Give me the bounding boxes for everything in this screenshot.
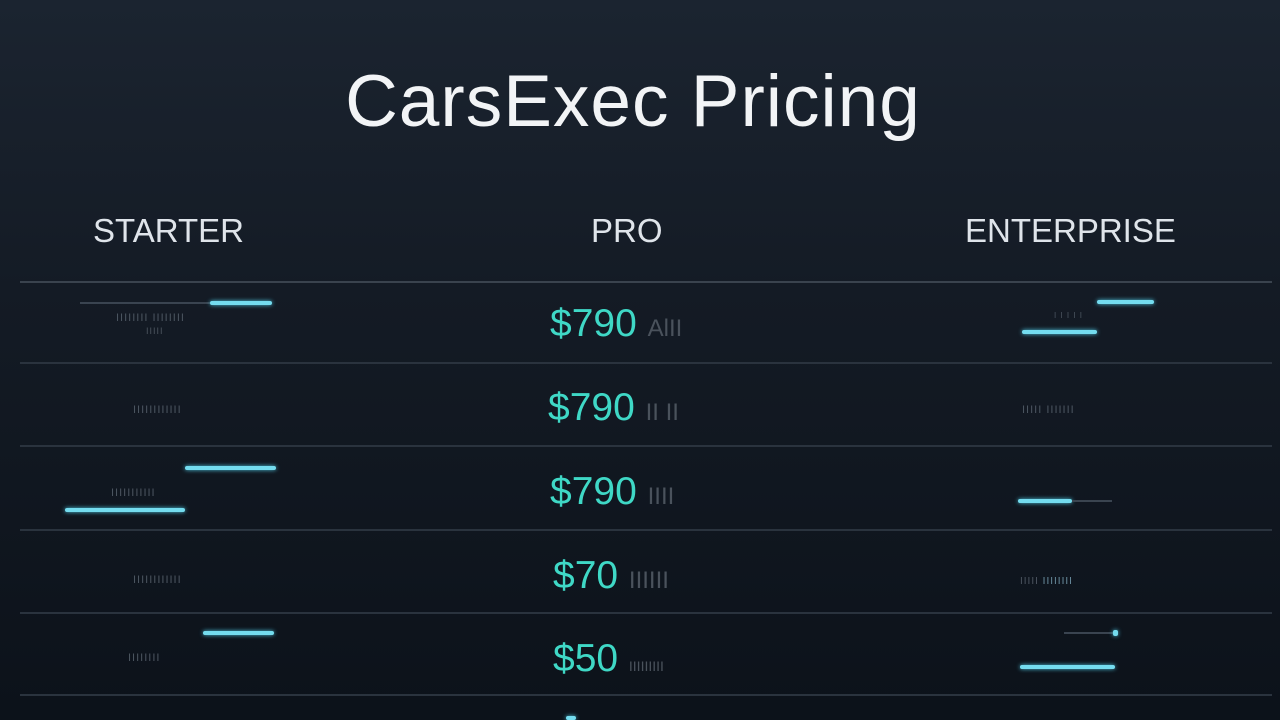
starter row 5: [128, 628, 277, 664]
price row 5: $50 IIIIIIIII: [553, 637, 664, 680]
starter row 1: IIIII: [146, 326, 164, 336]
enterprise row 1: [1019, 296, 1157, 338]
starter row 4: IIIIIIIIIIII: [133, 574, 182, 586]
starter row 1: IIIIIIII IIIIIIII: [116, 312, 185, 324]
price row 2: $790 II II: [548, 386, 679, 429]
starter row 3: [62, 462, 279, 516]
enterprise row 3: [1015, 496, 1112, 506]
partial price at bottom: [566, 716, 576, 720]
starter row 1: [80, 298, 275, 336]
enterprise row 1: I I I I I: [1054, 311, 1083, 320]
pro prices: [548, 302, 682, 680]
enterprise row 4: IIIII IIIIIIII: [1020, 576, 1073, 587]
price row 1: $790 AlII: [550, 302, 682, 345]
enterprise row 2: IIIII IIIIIII: [1022, 404, 1075, 416]
starter row 5: IIIIIIII: [128, 652, 160, 664]
price row 4: $70 IIIIII: [553, 554, 669, 597]
starter row 2: IIIIIIIIIIII: [133, 404, 182, 416]
price row 3: $790 IIII: [550, 470, 674, 513]
starter row 3: IIIIIIIIIII: [111, 487, 156, 499]
enterprise row 5: [1017, 627, 1121, 672]
header: starter: STARTER: [93, 212, 244, 249]
header: enterprise: ENTERPRISE: [965, 212, 1176, 249]
header: pro: PRO: [591, 212, 663, 249]
title: CarsExec Pricing: [345, 61, 921, 142]
